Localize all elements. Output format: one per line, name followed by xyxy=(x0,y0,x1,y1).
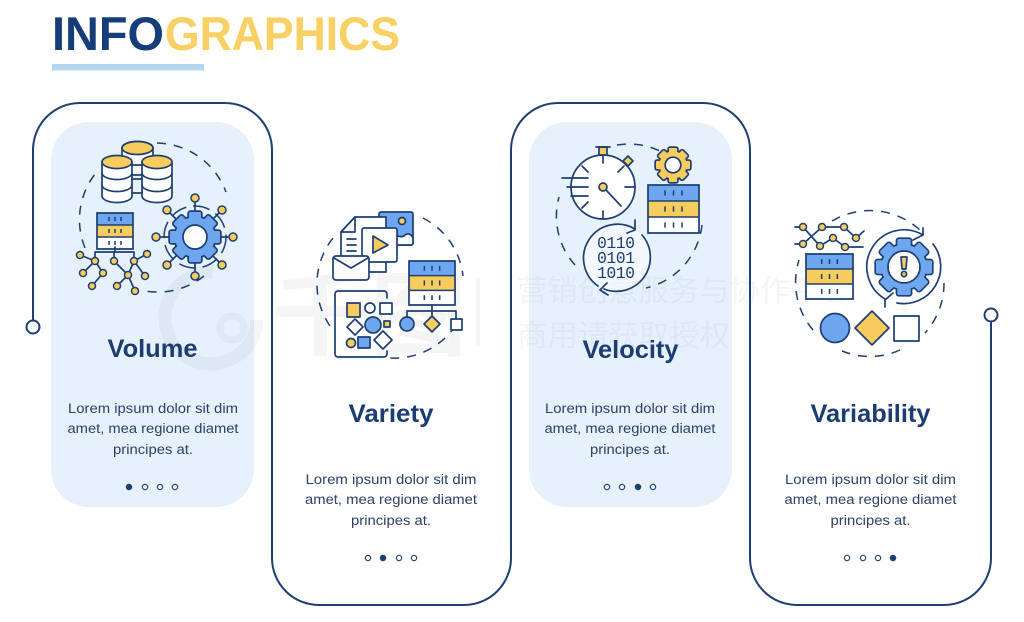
title underline xyxy=(52,64,204,70)
text block: velocity: Lorem ipsum dolor sit dim xyxy=(545,401,715,416)
text block: variety: principes at. xyxy=(351,513,431,528)
gear network xyxy=(152,194,237,280)
network tree xyxy=(76,247,150,294)
icon: variety xyxy=(317,212,463,358)
text block: variety: amet, mea regione diamet xyxy=(305,492,477,507)
basic shapes xyxy=(820,311,919,345)
heading: volume: Volume xyxy=(108,335,198,363)
text block: variability: principes at. xyxy=(830,513,910,528)
watermark: 营销创意服务与协作平台 xyxy=(517,275,851,308)
text block: variability: amet, mea regione diamet xyxy=(784,492,957,507)
binary cycle: 1010 xyxy=(597,264,635,283)
panel: velocity background xyxy=(529,122,732,507)
icon: volume xyxy=(76,142,237,294)
pagination: variability xyxy=(844,555,896,561)
text block: velocity xyxy=(544,401,716,457)
shapes panel xyxy=(335,291,392,357)
line chart xyxy=(795,224,864,250)
heading: variety: Variety xyxy=(348,400,434,428)
text block: variety xyxy=(305,472,477,528)
gear with alert xyxy=(867,228,941,307)
stopwatch xyxy=(562,147,635,219)
database cylinders xyxy=(102,142,172,202)
pagination: variety xyxy=(365,555,417,561)
heading: variability: Variability xyxy=(810,400,931,428)
title: INFO xyxy=(52,7,164,60)
pagination: volume xyxy=(126,484,178,490)
pagination: velocity xyxy=(604,484,656,490)
icon: variability xyxy=(795,211,944,356)
text block: volume: amet, mea regione diamet xyxy=(68,421,239,436)
watermark: 千图 xyxy=(272,266,467,368)
title: GRAPHICS xyxy=(165,7,400,60)
data table xyxy=(806,254,853,299)
icon: velocity xyxy=(556,144,702,295)
text block: variability xyxy=(784,472,957,528)
envelope xyxy=(333,256,369,280)
data table xyxy=(648,185,699,233)
yellow gear xyxy=(656,148,690,182)
connecting timeline frame xyxy=(26,103,998,605)
watermark xyxy=(165,266,851,368)
text block: variability: Lorem ipsum dolor sit dim xyxy=(785,472,956,487)
video card xyxy=(362,228,397,262)
panel: volume background xyxy=(51,122,254,507)
heading: velocity: Velocity xyxy=(582,336,679,364)
data table xyxy=(409,261,455,305)
hierarchy tree xyxy=(400,305,462,332)
image card xyxy=(379,212,413,245)
text block: volume xyxy=(68,401,239,457)
text block: volume: Lorem ipsum dolor sit dim xyxy=(68,401,238,416)
binary cycle: 0110 xyxy=(597,234,635,253)
title xyxy=(52,7,400,60)
document xyxy=(341,217,386,272)
text block: velocity: amet, mea regione diamet xyxy=(544,421,716,436)
binary cycle xyxy=(584,220,650,295)
data table xyxy=(97,213,133,249)
text block: velocity: principes at. xyxy=(590,442,670,457)
watermark: 商用请获取授权 xyxy=(517,320,730,353)
binary cycle: 0101 xyxy=(597,249,635,268)
text block: volume: principes at. xyxy=(113,442,193,457)
text block: variety: Lorem ipsum dolor sit dim xyxy=(306,472,476,487)
